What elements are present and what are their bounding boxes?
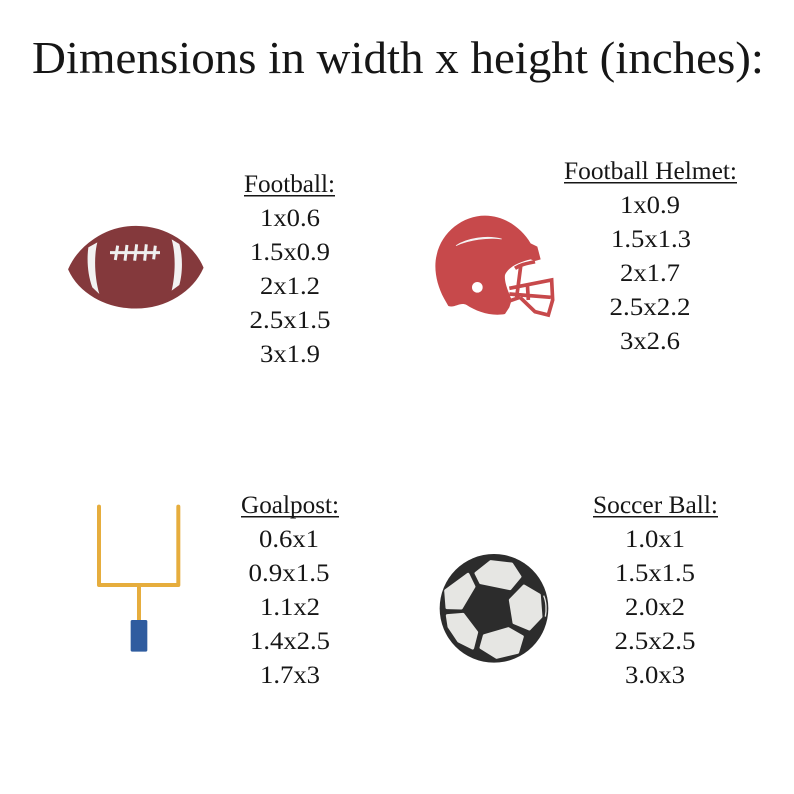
heading: Soccer Ball: Soccer Ball:	[593, 492, 718, 519]
soccer ball sizes: 2.0x2	[625, 594, 685, 621]
panel: football helmet	[435, 158, 737, 355]
football helmet sizes	[564, 158, 737, 355]
heading: Goalpost: Goalpost:	[241, 492, 339, 519]
football sizes	[244, 171, 335, 368]
goalpost sizes: 0.6x1	[259, 526, 319, 553]
panel: goalpost	[99, 492, 339, 689]
soccer ball sizes: 1.5x1.5	[615, 560, 695, 587]
soccer ball sizes: 2.5x2.5	[614, 628, 696, 655]
football helmet sizes: 3x2.6	[620, 328, 680, 355]
goalpost sizes	[241, 492, 339, 689]
goalpost sizes: 0.9x1.5	[248, 560, 330, 587]
icon: football	[69, 227, 202, 307]
heading: Football: Football:	[244, 171, 335, 198]
icon: football helmet	[435, 216, 553, 315]
heading: Football Helmet: Football Helmet:	[564, 158, 737, 185]
football sizes: 2.5x1.5	[250, 307, 330, 334]
title: Dimensions in width x height (inches):	[32, 32, 764, 83]
football sizes: 1.5x0.9	[250, 239, 330, 266]
soccer ball sizes: 1.0x1	[625, 526, 685, 553]
soccer ball sizes: 3.0x3	[625, 662, 685, 689]
goalpost sizes: 1.7x3	[260, 662, 320, 689]
icon: goalpost	[99, 507, 178, 652]
football sizes: 1x0.6	[260, 205, 320, 232]
goalpost sizes: 1.1x2	[260, 594, 320, 621]
football helmet sizes: 1x0.9	[620, 192, 680, 219]
panel: football	[69, 171, 335, 368]
football sizes: 3x1.9	[260, 341, 320, 368]
football helmet sizes: 1.5x1.3	[611, 226, 691, 253]
icon: soccer ball	[440, 554, 548, 663]
panel: soccer ball	[440, 492, 718, 689]
football helmet sizes: 2x1.7	[620, 260, 680, 287]
soccer ball sizes	[593, 492, 718, 689]
football sizes: 2x1.2	[260, 273, 320, 300]
football helmet sizes: 2.5x2.2	[610, 294, 690, 321]
goalpost sizes: 1.4x2.5	[250, 628, 330, 655]
